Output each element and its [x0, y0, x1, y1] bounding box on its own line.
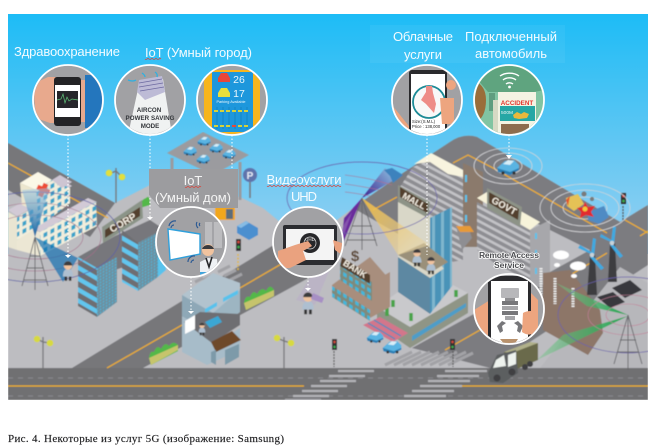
- heading: connected car: Подключенный: [465, 29, 557, 44]
- label panel: IoT smart home: (Умный дом): [155, 190, 231, 205]
- heading: UHD video services: [266, 172, 342, 204]
- circle: aircon power saving: POWER SAVING: [126, 115, 175, 122]
- dollar icon: $: [351, 248, 360, 265]
- hospital: [8, 172, 97, 256]
- mall and govt buildings: [377, 153, 550, 348]
- remote controlled truck: [488, 342, 538, 383]
- heading: UHD video services: Видеоуслуги: [266, 172, 342, 187]
- govt sign: GOVT: [489, 195, 518, 218]
- heading: cloud services: [393, 29, 453, 62]
- mall sign: [398, 185, 430, 218]
- circle: remote access phone: [474, 274, 544, 346]
- green beams and signal tower right: [538, 276, 648, 369]
- illustration background: sky: [8, 14, 648, 254]
- bank awning and parked cars: [363, 317, 408, 354]
- ground: [8, 136, 648, 368]
- heading: connected car: автомобиль: [475, 46, 547, 61]
- connected car on road: [474, 148, 542, 184]
- road markings: [8, 155, 648, 396]
- mall sign: MALL: [401, 191, 428, 212]
- circle: aircon power saving: [115, 65, 185, 135]
- circle: connected car dashboard: ACCIDENT: [501, 100, 533, 107]
- road: bottom horizontal: [8, 368, 648, 400]
- circle: aircon power saving: MODE: [141, 123, 159, 130]
- heading: cloud services: Облачные: [393, 29, 453, 44]
- smart home building: [182, 273, 241, 365]
- delivery van: [237, 221, 258, 240]
- road: central diagonal: [72, 235, 338, 368]
- heading: UHD video services: UHD: [291, 189, 317, 204]
- traffic lights: [236, 193, 626, 367]
- corp buildings: [78, 200, 166, 317]
- circle: smart home devices: [156, 207, 226, 285]
- circle: UHD video tablet: UHD: [305, 237, 316, 242]
- figure caption: Рис. 4. Некоторые из услуг 5G (изображение: Samsung): [8, 433, 284, 445]
- crosswalks: [285, 371, 487, 400]
- circle: UHD video tablet: [273, 207, 343, 277]
- circle: healthcare smartwatch: [33, 65, 103, 135]
- mall plaza base: [377, 285, 468, 348]
- dotted connectors with arrow tips: [65, 135, 512, 314]
- circle: smart parking display: Parking Available: [216, 100, 246, 104]
- label: remote access service: Service: [494, 260, 524, 270]
- car accident: [540, 184, 630, 232]
- wind turbines and mountains: [541, 226, 642, 355]
- label panel: IoT smart home: IoT: [184, 173, 202, 188]
- label: remote access service: Remote Access: [479, 250, 539, 260]
- heading: IoT smart city: IoT (Умный город): [145, 45, 252, 60]
- heading: healthcare: Здравоохранение: [14, 44, 120, 59]
- circle: smart parking display: [197, 65, 267, 136]
- heading: cloud services: услуги: [404, 47, 442, 62]
- clouds of smoke: [553, 250, 569, 260]
- bank building: [332, 248, 390, 321]
- circle: smart parking display: 17: [233, 88, 245, 100]
- circle: connected car dashboard: [470, 65, 544, 136]
- solar panels: [597, 280, 642, 308]
- bushes: [140, 197, 274, 365]
- signal tower left with beams: [0, 188, 120, 290]
- circle: cloud shopping phone: Price : 138,000: [412, 124, 441, 129]
- parking sign: P: [247, 171, 254, 182]
- bank sign: BANK: [341, 258, 369, 280]
- circle: aircon power saving: AIRCON: [137, 107, 162, 114]
- mall terrace with shoppers: [398, 243, 452, 314]
- signal tower center with beams: [287, 162, 437, 314]
- circle: cloud shopping phone: [392, 65, 462, 140]
- street lights: [34, 168, 294, 368]
- parking garage: [167, 132, 257, 220]
- header panel behind cloud and car labels: [370, 25, 565, 63]
- heading: connected car: [465, 29, 557, 61]
- circle: smart parking display: 26: [233, 74, 245, 86]
- illustration scene: [0, 132, 661, 400]
- lighter ground at lower right: [594, 266, 634, 300]
- road: upper right with junction: [353, 136, 648, 368]
- corp sign: CORP: [108, 211, 139, 235]
- label: remote access service: [479, 250, 539, 270]
- govt building: [477, 188, 550, 290]
- road: upper left: [8, 143, 115, 237]
- label panel: IoT smart home: [149, 169, 238, 208]
- circle: connected car dashboard: 500M: [501, 110, 513, 116]
- circle: cloud shopping phone: Size:(S.M.L): [412, 119, 436, 124]
